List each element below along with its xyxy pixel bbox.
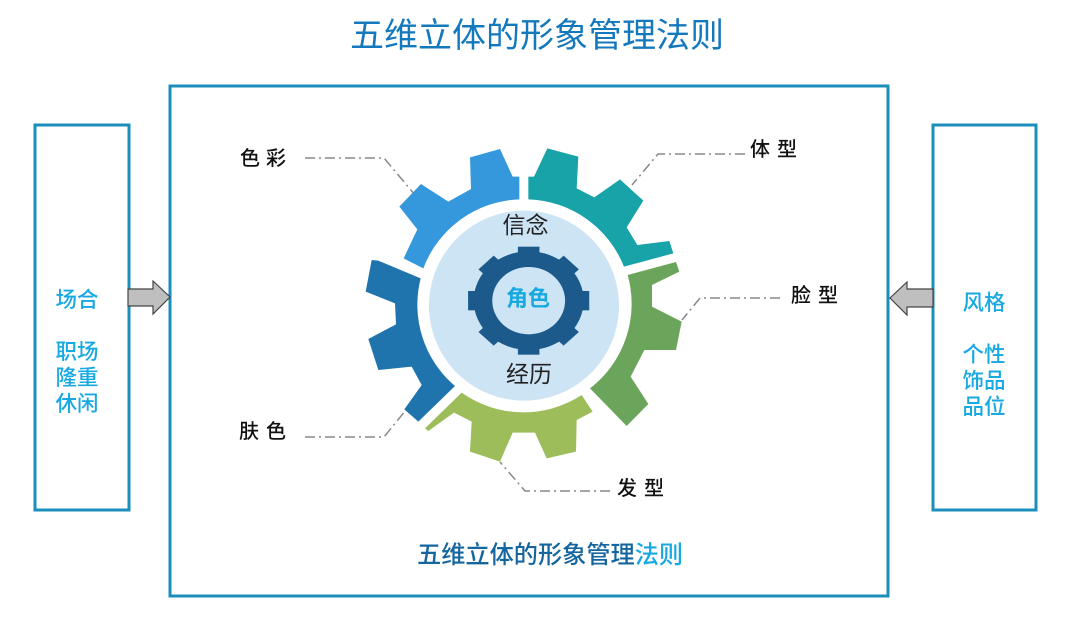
panel: right context: 个性 [962, 343, 1006, 367]
panel: left context: 隆重 [55, 366, 99, 390]
leader lines [305, 154, 780, 491]
caption: 五维立体的形象管理法则 [417, 542, 683, 569]
label: 色彩: 色彩 [240, 147, 292, 170]
arrow: right into frame [890, 282, 933, 315]
arrow: left into frame [128, 281, 170, 314]
panel: right context [933, 125, 1036, 510]
diagram: segmented gear [366, 148, 682, 462]
panel: right context: 风格 [962, 291, 1006, 315]
panel: left context: 场合 [55, 288, 99, 312]
gear segment: left [366, 260, 455, 422]
gear segment: top right [528, 148, 673, 267]
label: 肤色: 肤色 [239, 420, 293, 443]
panel: left context [35, 125, 129, 510]
icon: center gear [468, 247, 589, 355]
panel: left context: 职场 [55, 340, 99, 364]
gear segment: bottom [425, 393, 593, 462]
panel: main frame [170, 86, 888, 596]
label: 角色: 角色 [506, 286, 550, 311]
gear segment: top left [399, 149, 519, 268]
gear segment: right [590, 262, 682, 426]
panel: right context: 品位 [962, 395, 1006, 419]
inner circle [429, 211, 619, 401]
label: 信念: 信念 [502, 212, 548, 238]
label: 发型: 发型 [617, 477, 671, 500]
label: 脸型: 脸型 [791, 284, 845, 307]
label: 体型: 体型 [750, 138, 804, 161]
label: 经历: 经历 [506, 361, 552, 387]
title: 五维立体的形象管理法则 [350, 17, 724, 55]
panel: right context: 饰品 [962, 369, 1006, 393]
panel: left context: 休闲 [55, 392, 99, 416]
